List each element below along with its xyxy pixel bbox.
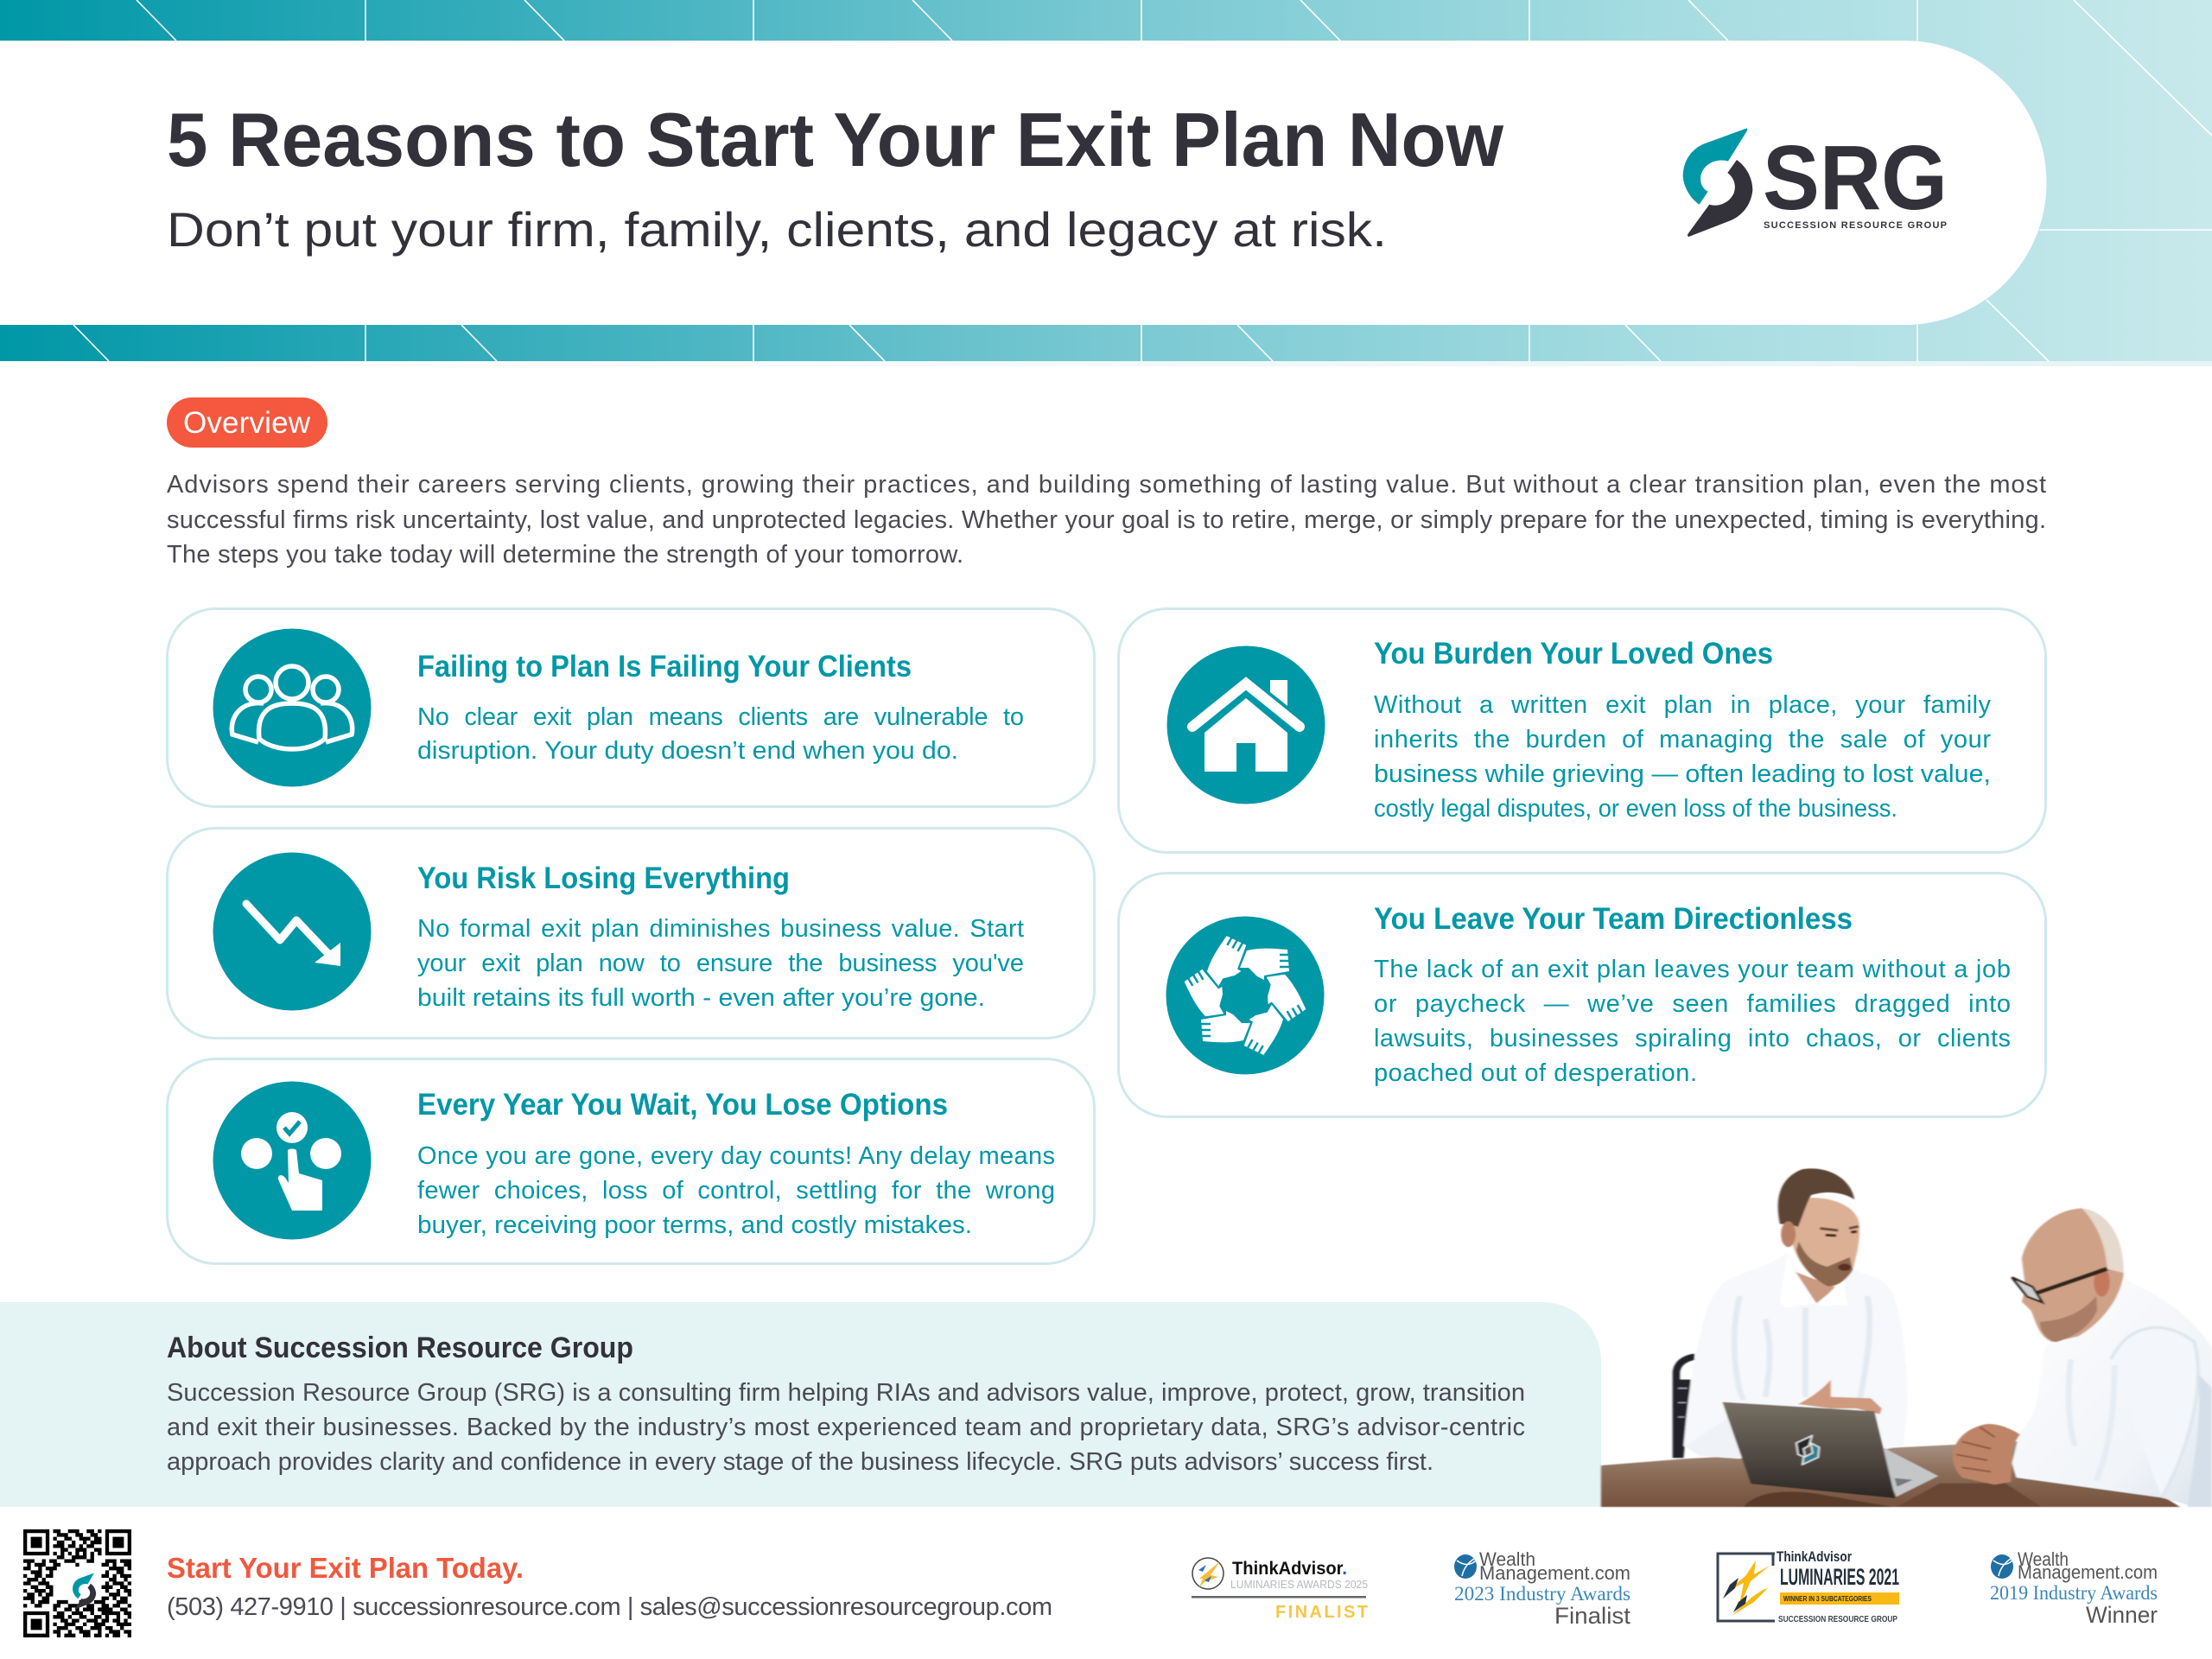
award: WealthManagement 2023 finalist: 2023 Industry Awards <box>1454 1583 1630 1605</box>
man right <box>1953 1208 2212 1507</box>
award: ThinkAdvisor Luminaries 2021 <box>1718 1548 1899 1624</box>
call to action heading: Start Your Exit Plan Today. <box>167 1552 524 1584</box>
body text: or paycheck — we’ve seen families dragged into <box>1374 990 2011 1018</box>
award: ThinkAdvisor Luminaries 2025 finalist: ThinkAdvisor. <box>1232 1559 1347 1579</box>
heading: You Risk Losing Everything <box>417 861 790 895</box>
body text: Once you are gone, every day counts! Any delay means <box>417 1142 1055 1170</box>
award: WealthManagement 2019 winner: Management.com <box>2018 1561 2158 1583</box>
overview badge <box>167 397 327 448</box>
icon: linked hands <box>1166 916 1324 1075</box>
award emblem <box>1192 1558 1224 1589</box>
body text <box>1374 691 1991 823</box>
icon: declining arrow <box>213 852 372 1011</box>
award: WealthManagement 2019 winner: 2019 Industry Awards <box>1990 1582 2158 1604</box>
body text <box>417 915 1024 1012</box>
about text: and exit their businesses. Backed by the industry’s most experienced team and proprietary data, SRG’s advisor-centric <box>167 1414 1525 1441</box>
logo tagline: SUCCESSION RESOURCE GROUP <box>1764 220 1947 231</box>
body text: poached out of desperation. <box>1374 1059 1697 1087</box>
award globe <box>1991 1554 2013 1579</box>
chair <box>1673 1354 1694 1458</box>
icon: house <box>1166 646 1325 804</box>
contact details: (503) 427-9910 | successionresource.com | sales@successionresourcegroup.com <box>167 1593 1052 1621</box>
award: WealthManagement 2023 finalist: Management.com <box>1479 1562 1630 1584</box>
body text: lawsuits, businesses spiraling into chaos, or clients <box>1374 1025 2011 1052</box>
body text: costly legal disputes, or even loss of the business. <box>1374 795 1897 823</box>
overview paragraph: successful firms risk uncertainty, lost value, and unprotected legacies. Whether your goal is to retire, merge, or simply prepare for the unexpected, timing is everything. <box>167 506 2046 534</box>
body text: The lack of an exit plan leaves your team without a job <box>1374 956 2011 983</box>
laptop logo <box>1796 1436 1819 1465</box>
award: ThinkAdvisor Luminaries 2021: SUCCESSION RESOURCE GROUP <box>1778 1615 1897 1624</box>
award: ThinkAdvisor Luminaries 2025 finalist: LUMINARIES AWARDS 2025 <box>1230 1578 1368 1591</box>
body text <box>417 703 1024 765</box>
award: WealthManagement 2019 winner <box>1990 1548 2158 1628</box>
laptop <box>1722 1402 1938 1498</box>
award: WealthManagement 2023 finalist: Finalist <box>1554 1603 1631 1629</box>
about panel <box>0 1302 1601 1507</box>
body text <box>417 1142 1055 1239</box>
award frame and stars <box>1718 1554 1775 1621</box>
body text: business while grieving — often leading to lost value, <box>1374 760 1991 788</box>
heading: You Burden Your Loved Ones <box>1374 637 1773 671</box>
about text: Succession Resource Group (SRG) is a consulting firm helping RIAs and advisors value, improve, protect, grow, transition <box>167 1379 1525 1407</box>
header banner <box>0 0 2212 366</box>
body text: Without a written exit plan in place, your family <box>1374 691 1991 719</box>
award: ThinkAdvisor Luminaries 2021: LUMINARIES 2021 <box>1780 1564 1899 1590</box>
award globe <box>1454 1554 1477 1579</box>
man left <box>1683 1168 1908 1459</box>
card: failing to plan <box>168 608 1094 807</box>
body text: No clear exit plan means clients are vulnerable to <box>417 703 1024 731</box>
award: WealthManagement 2019 winner: Wealth <box>2018 1548 2069 1570</box>
QR code <box>23 1529 131 1637</box>
body text: buyer, receiving poor terms, and costly mistakes. <box>417 1211 972 1239</box>
about heading: About Succession Resource Group <box>167 1332 633 1364</box>
award: ThinkAdvisor Luminaries 2025 finalist <box>1192 1558 1368 1622</box>
card: risk losing everything <box>168 828 1094 1039</box>
overview paragraph <box>167 471 2046 569</box>
heading: Failing to Plan Is Failing Your Clients <box>417 650 912 683</box>
card: every year you wait <box>168 1059 1094 1263</box>
logo wordmark: SRG <box>1763 127 1948 229</box>
body text: disruption. Your duty doesn’t end when you do. <box>417 737 958 765</box>
logo: SRG <box>1683 127 1948 237</box>
about text <box>167 1379 1525 1476</box>
award: ThinkAdvisor Luminaries 2021: WINNER IN 3 SUBCATEGORIES <box>1783 1595 1872 1603</box>
body text: inherits the burden of managing the sale of your <box>1374 726 1991 753</box>
table <box>1601 1441 2180 1507</box>
card: burden loved ones <box>1118 608 2046 852</box>
body text: built retains its full worth - even after you’re gone. <box>417 984 985 1012</box>
heading: Every Year You Wait, You Lose Options <box>417 1088 948 1122</box>
body text: No formal exit plan diminishes business value. Start <box>417 915 1024 943</box>
QR centre logo <box>73 1573 96 1610</box>
icon: people <box>213 629 372 786</box>
body text: fewer choices, loss of control, settling for the wrong <box>417 1177 1055 1205</box>
body text <box>1374 956 2011 1087</box>
icon: choice hand <box>213 1082 372 1239</box>
award: WealthManagement 2019 winner: Winner <box>2086 1602 2158 1628</box>
overview paragraph: The steps you take today will determine the strength of your tomorrow. <box>167 541 963 569</box>
award: WealthManagement 2023 finalist: Wealth <box>1479 1548 1535 1570</box>
overview paragraph: Advisors spend their careers serving clients, growing their practices, and building something of lasting value. But without a clear transition plan, even the most <box>167 471 2046 499</box>
award: WealthManagement 2023 finalist <box>1454 1548 1631 1629</box>
overview badge: Overview <box>183 406 311 440</box>
logo mark <box>1683 128 1752 237</box>
photo: two advisors at a table <box>1601 1168 2212 1507</box>
award: ThinkAdvisor Luminaries 2025 finalist: FINALIST <box>1275 1603 1368 1622</box>
card: team directionless <box>1118 873 2046 1116</box>
body text: your exit plan now to ensure the business you've <box>417 950 1024 977</box>
title: 5 Reasons to Start Your Exit Plan Now <box>167 97 1504 182</box>
award: ThinkAdvisor Luminaries 2021: ThinkAdvisor <box>1777 1548 1852 1565</box>
about text: approach provides clarity and confidence in every stage of the business lifecycle. SRG puts advisors’ success first. <box>167 1448 1433 1476</box>
heading: You Leave Your Team Directionless <box>1374 902 1853 936</box>
subtitle: Don’t put your firm, family, clients, and legacy at risk. <box>167 202 1387 257</box>
header white pill <box>0 41 2046 325</box>
